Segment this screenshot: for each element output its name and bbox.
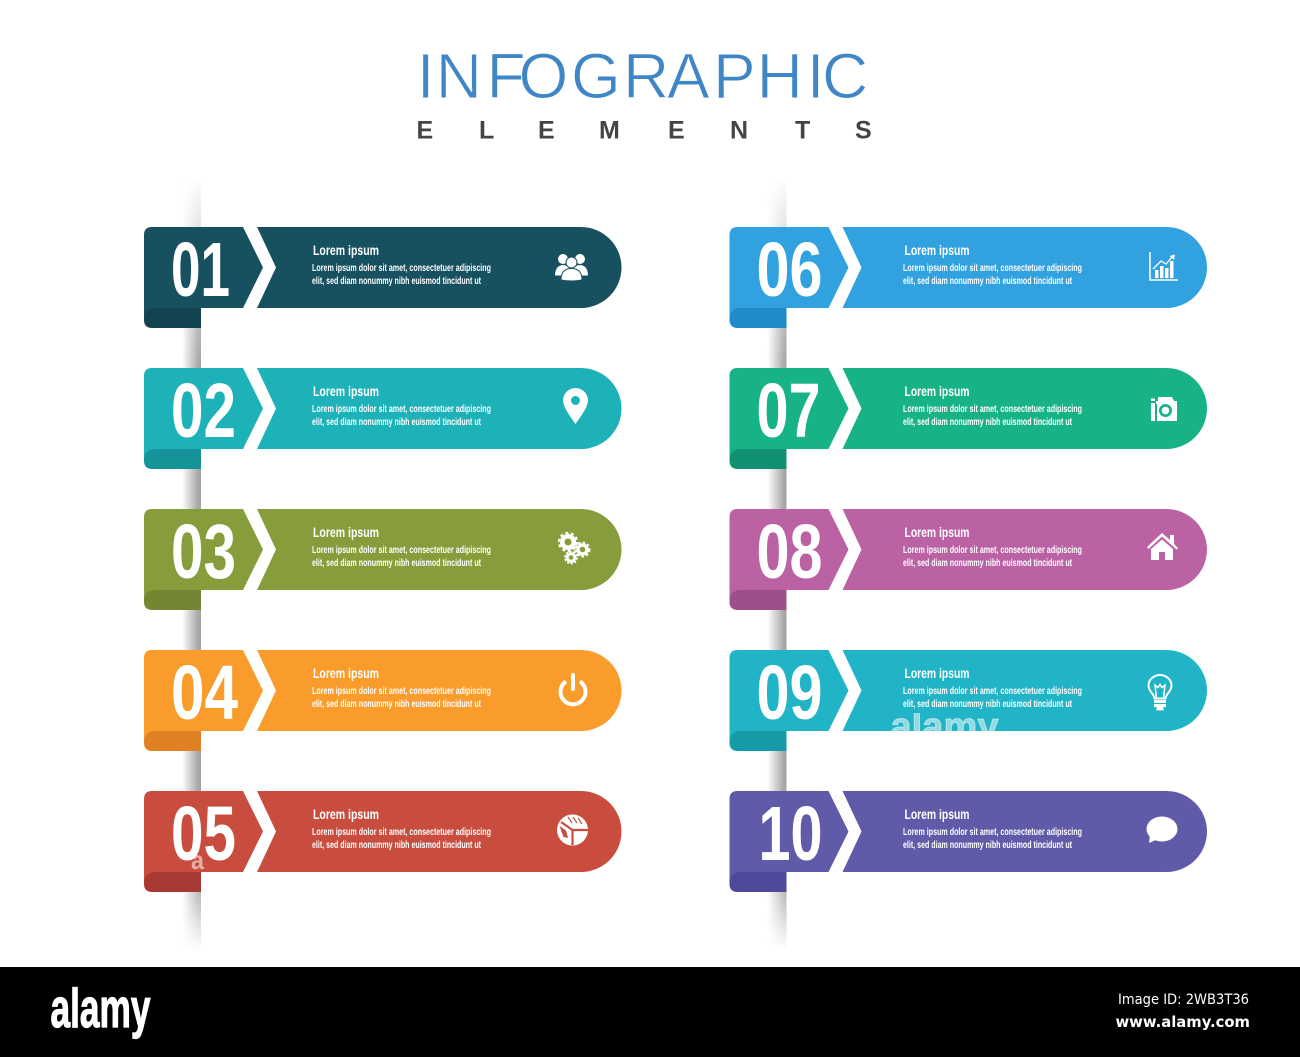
- text 04: Lorem ipsum dolor sit amet, consectetuer adipiscing: [312, 685, 491, 697]
- icon: growth chart: [1150, 252, 1178, 280]
- text 07: Lorem ipsum dolor sit amet, consectetuer adipiscing: [903, 403, 1082, 415]
- text 02: [312, 403, 491, 428]
- watermark alamy: alamy: [890, 706, 998, 748]
- text 04: [312, 685, 491, 710]
- icon: location pin: [563, 388, 588, 424]
- text 08: [903, 544, 1082, 569]
- icon: speech bubble: [1146, 816, 1178, 843]
- text 02: elit, sed diam nonummy nibh euismod tincidunt ut: [312, 416, 481, 428]
- text 05: Lorem ipsum dolor sit amet, consectetuer adipiscing: [312, 826, 491, 838]
- text 06: Lorem ipsum dolor sit amet, consectetuer adipiscing: [903, 262, 1082, 274]
- item 01: [144, 227, 622, 328]
- item 05: [144, 791, 622, 892]
- text 09: elit, sed diam nonummy nibh euismod tincidunt ut: [903, 698, 1072, 710]
- icon: pie chart: [557, 814, 588, 846]
- text 02: Lorem ipsum dolor sit amet, consectetuer adipiscing: [312, 403, 491, 415]
- text 10: Lorem ipsum dolor sit amet, consectetuer adipiscing: [903, 826, 1082, 838]
- number 06: 06: [756, 227, 822, 313]
- number 07: 07: [756, 368, 820, 454]
- right column shadow strip: [769, 192, 786, 944]
- text 07: [903, 403, 1082, 428]
- number 08: 08: [756, 509, 822, 595]
- title: INFOGRAPHIC: INFOGRAPHIC: [417, 40, 868, 112]
- heading 04: Lorem ipsum: [313, 665, 379, 681]
- heading 03: Lorem ipsum: [313, 524, 379, 540]
- title: [416, 40, 872, 145]
- heading 01: Lorem ipsum: [313, 242, 379, 258]
- text 04: elit, sed diam nonummy nibh euismod tincidunt ut: [312, 698, 481, 710]
- icon: power: [560, 675, 586, 704]
- text 06: elit, sed diam nonummy nibh euismod tincidunt ut: [903, 275, 1072, 287]
- heading 07: Lorem ipsum: [904, 383, 970, 399]
- footer logo: alamy: [50, 977, 151, 1039]
- text 05: elit, sed diam nonummy nibh euismod tincidunt ut: [312, 839, 481, 851]
- text 08: Lorem ipsum dolor sit amet, consectetuer adipiscing: [903, 544, 1082, 556]
- item 03: [144, 509, 622, 610]
- heading 08: Lorem ipsum: [904, 524, 970, 540]
- left column shadow strip: [184, 192, 201, 944]
- number 05: 05: [171, 791, 236, 877]
- text 09: Lorem ipsum dolor sit amet, consectetuer adipiscing: [903, 685, 1082, 697]
- text 01: Lorem ipsum dolor sit amet, consectetuer adipiscing: [312, 262, 491, 274]
- heading 05: Lorem ipsum: [313, 806, 379, 822]
- number 02: 02: [171, 368, 236, 454]
- watermark a: a: [191, 845, 204, 875]
- heading 06: Lorem ipsum: [904, 242, 970, 258]
- text 06: [903, 262, 1082, 287]
- item 07: [730, 368, 1207, 469]
- item 08: [730, 509, 1207, 610]
- text 10: [903, 826, 1082, 851]
- number 10: 10: [758, 791, 822, 877]
- icon: camera: [1151, 397, 1177, 421]
- icon: people: [554, 254, 588, 281]
- item 04: [144, 650, 622, 751]
- item 02: [144, 368, 622, 469]
- text 01: [312, 262, 491, 287]
- text 08: elit, sed diam nonummy nibh euismod tincidunt ut: [903, 557, 1072, 569]
- heading 09: Lorem ipsum: [904, 665, 970, 681]
- number 09: 09: [756, 650, 822, 736]
- text 03: Lorem ipsum dolor sit amet, consectetuer adipiscing: [312, 544, 491, 556]
- item 06: [730, 227, 1207, 328]
- text 03: elit, sed diam nonummy nibh euismod tincidunt ut: [312, 557, 481, 569]
- text 01: elit, sed diam nonummy nibh euismod tincidunt ut: [312, 275, 481, 287]
- text 10: elit, sed diam nonummy nibh euismod tincidunt ut: [903, 839, 1072, 851]
- icon: gears: [559, 533, 590, 564]
- website: www.alamy.com: [1116, 1013, 1250, 1031]
- item 10: [730, 791, 1207, 892]
- text 09: [903, 685, 1082, 710]
- icon: house: [1147, 533, 1178, 560]
- number 03: 03: [171, 509, 236, 595]
- icon: light bulb: [1148, 675, 1172, 710]
- item 09: [730, 650, 1207, 751]
- image id: Image ID: 2WB3T36: [1118, 992, 1249, 1008]
- text 07: elit, sed diam nonummy nibh euismod tincidunt ut: [903, 416, 1072, 428]
- number 01: 01: [171, 227, 230, 313]
- number 04: 04: [171, 650, 238, 736]
- text 03: [312, 544, 491, 569]
- heading 02: Lorem ipsum: [313, 383, 379, 399]
- subtitle: ELEMENTS: ELEMENTS: [416, 117, 872, 145]
- footer bar: [0, 967, 1300, 1057]
- heading 10: Lorem ipsum: [904, 806, 970, 822]
- text 05: [312, 826, 491, 851]
